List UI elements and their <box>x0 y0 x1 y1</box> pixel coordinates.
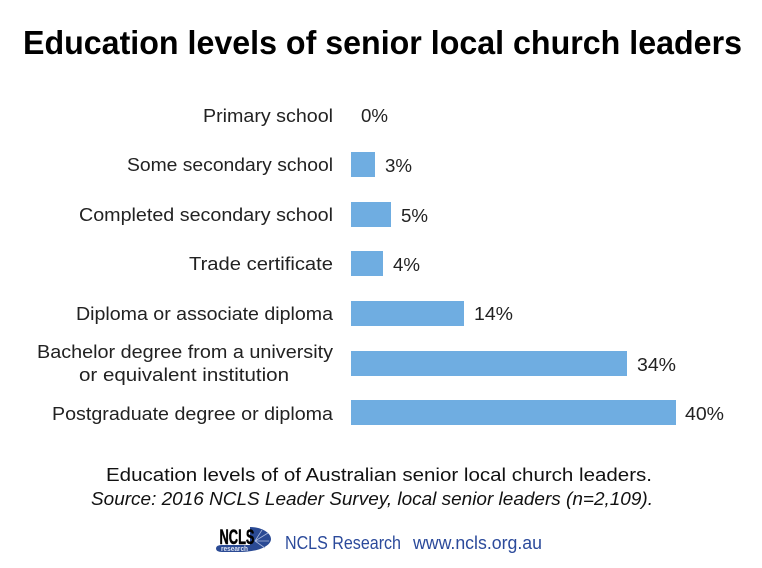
caption <box>91 465 653 509</box>
bar chart <box>37 105 724 425</box>
value labels: 4% <box>393 255 420 275</box>
icon: NCLS logo: NCLS <box>220 526 254 549</box>
footer: NCLS Research website: www.ncls.org.au <box>412 533 542 553</box>
title: Education levels of senior local church leaders <box>23 24 742 61</box>
category labels: Diploma or associate diploma <box>76 303 334 324</box>
value labels: 0% <box>361 106 388 126</box>
value labels: 40% <box>685 404 724 424</box>
value labels: 14% <box>474 304 513 324</box>
value labels: 5% <box>401 206 428 226</box>
value labels: 3% <box>385 156 412 176</box>
caption: Education levels of of Australian senior local church leaders. <box>106 465 652 485</box>
category labels: Postgraduate degree or diploma <box>52 403 334 424</box>
category labels: or equivalent institution <box>79 364 289 385</box>
caption: Source: 2016 NCLS Leader Survey, local senior leaders (n=2,109). <box>91 489 653 509</box>
bars <box>351 152 676 425</box>
category labels: Trade certificate <box>189 253 333 274</box>
category labels: Completed secondary school <box>79 204 333 225</box>
value labels <box>361 106 724 424</box>
value labels: 34% <box>637 355 676 375</box>
category labels <box>37 105 334 424</box>
category labels: Some secondary school <box>127 154 333 175</box>
category labels: Primary school <box>203 105 333 126</box>
footer: NCLS Research website <box>285 533 542 553</box>
category labels: Bachelor degree from a university <box>37 341 334 362</box>
icon: NCLS logo: research <box>221 544 248 553</box>
footer: NCLS Research website: NCLS Research <box>285 533 401 553</box>
